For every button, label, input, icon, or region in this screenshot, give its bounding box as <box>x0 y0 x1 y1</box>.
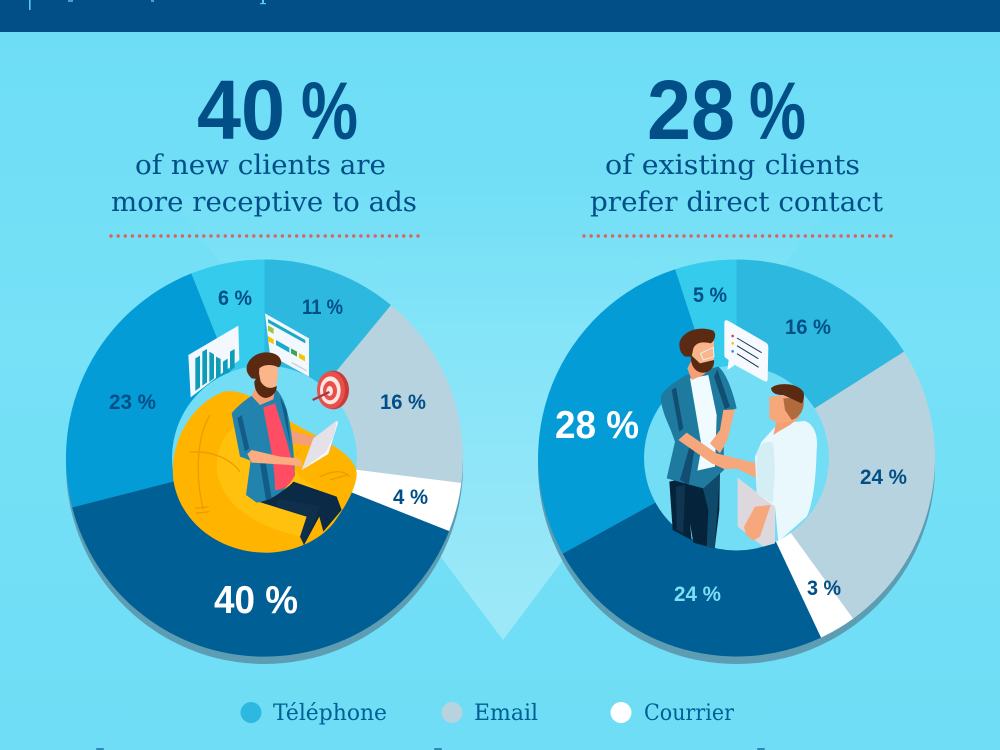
value labels: 23 % <box>109 391 156 414</box>
subtitle line 2: more receptive to ads <box>111 187 417 218</box>
value labels: 16 % <box>380 391 426 414</box>
header band <box>0 0 1000 32</box>
percent sign 28: % <box>749 66 806 157</box>
heading: existing clients <box>590 63 883 218</box>
man: tablet <box>302 421 337 470</box>
subtitle line 1: of new clients are <box>135 150 386 181</box>
donut chart: new clients <box>66 259 463 664</box>
legend item: Courrier <box>610 701 734 726</box>
man: far arm <box>290 430 332 450</box>
big number 40: 40 <box>197 63 285 157</box>
man left: arms <box>678 433 757 478</box>
man right: folder <box>738 478 775 547</box>
man: near arm <box>247 450 303 467</box>
value labels: 24 % <box>674 583 721 606</box>
value labels: 5 % <box>693 284 727 307</box>
icon: bar chart card <box>188 326 239 397</box>
man: head <box>247 352 281 405</box>
illustration: handshake between two men <box>661 320 817 549</box>
icon: dashboard card <box>265 313 309 377</box>
subtitle line 1: of existing clients <box>605 150 860 181</box>
man left: jacket <box>661 367 737 488</box>
man left: head <box>679 329 715 380</box>
man right: arm and neck <box>773 413 800 435</box>
value labels <box>109 287 428 622</box>
legend item: Email <box>442 701 538 726</box>
value labels <box>555 284 907 606</box>
man: red shirt <box>263 403 295 490</box>
value labels: 3 % <box>807 577 841 600</box>
value labels: 6 % <box>218 287 252 310</box>
legend item: Courrier: Courrier <box>644 701 734 726</box>
illustration: man on bean bag with tablet <box>173 313 357 553</box>
subtitle line 2: prefer direct contact <box>590 187 883 218</box>
heading: new clients <box>111 63 417 218</box>
big number 28: 28 <box>647 63 735 157</box>
value labels: 11 % <box>302 296 343 319</box>
bean bag <box>173 391 357 553</box>
legend <box>240 701 734 726</box>
man left: trousers <box>669 470 720 549</box>
icon: target with arrow <box>313 371 349 409</box>
man right: shirt <box>755 421 817 542</box>
donut chart: existing clients <box>538 260 935 664</box>
man: trousers <box>255 482 342 545</box>
man right: head <box>769 384 804 423</box>
legend item: Email: Email <box>474 701 538 726</box>
percent sign 40: % <box>301 66 358 157</box>
icon: speech bubble checklist <box>724 320 768 382</box>
value labels: 28 % <box>555 404 639 447</box>
legend item: Téléphone: Téléphone <box>273 701 387 726</box>
value labels: 16 % <box>785 316 831 339</box>
man left: shirt <box>690 375 717 471</box>
value labels: 40 % <box>214 579 298 622</box>
value labels: 4 % <box>393 486 428 509</box>
man: jacket <box>232 390 295 503</box>
value labels: 24 % <box>860 466 907 489</box>
